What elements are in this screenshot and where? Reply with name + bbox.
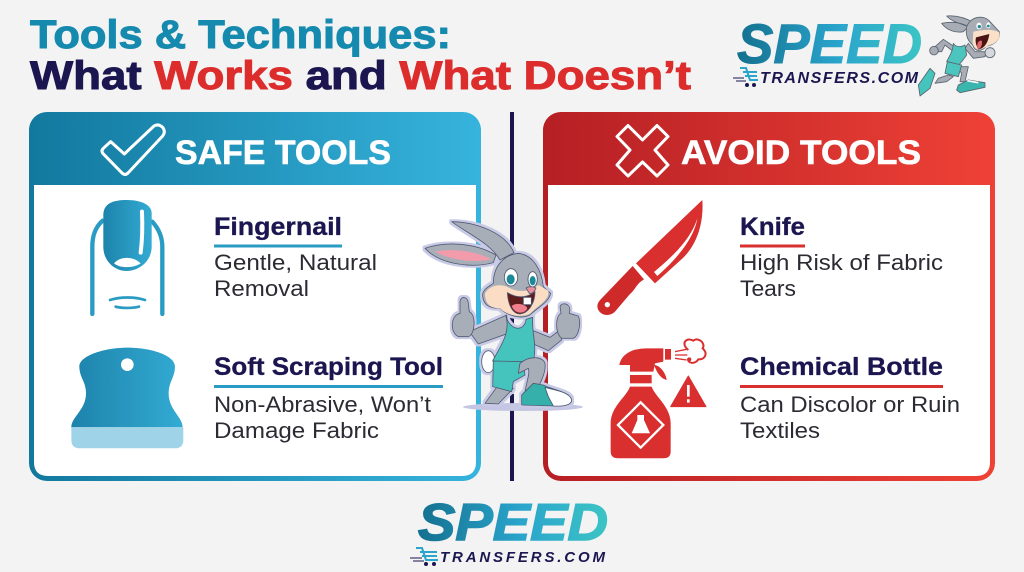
panel body: avoid tools (548, 185, 990, 476)
heading: avoid tools: AVOID TOOLS (681, 134, 921, 172)
panel body: safe tools (34, 185, 476, 476)
text: fingernail: Removal (214, 276, 309, 301)
text: chemical bottle: Textiles (740, 418, 820, 443)
panel: avoid tools (543, 112, 995, 481)
text: knife: High Risk of Fabric (740, 250, 943, 275)
heading: safe tools: SAFE TOOLS (175, 134, 391, 172)
icon: knife (597, 200, 703, 315)
text: soft scraping tool: Non-Abrasive, Won’t (214, 392, 431, 417)
text: fingernail (214, 213, 377, 301)
text: soft scraping tool (214, 353, 443, 443)
icon: check mark (102, 125, 164, 174)
footer logo tagline: TRANSFERS.COM (440, 549, 606, 566)
mascot: rabbit thumbs up (425, 222, 580, 406)
title: Tools & Techniques: (30, 13, 451, 57)
logo running rabbit (918, 16, 1000, 96)
mascot shadow (463, 403, 583, 411)
text: knife: Tears (740, 276, 796, 301)
text: fingernail: Gentle, Natural (214, 250, 377, 275)
text: chemical bottle: Can Discolor or Ruin (740, 392, 960, 417)
title: What Works and What Doesn’t (30, 54, 691, 98)
icon: soft scraping tool (71, 348, 183, 448)
logo wordmark: SPEED (737, 12, 922, 75)
text: fingernail: Fingernail (214, 213, 342, 241)
logo tagline: TRANSFERS.COM (760, 70, 919, 87)
icon: fingernail (92, 200, 162, 314)
footer logo wordmark: SPEED (418, 494, 608, 552)
text: knife (740, 213, 943, 301)
logo cart icon (733, 68, 758, 86)
text: soft scraping tool: Damage Fabric (214, 418, 379, 443)
text: chemical bottle (740, 353, 960, 443)
text: knife: Knife (740, 213, 805, 241)
panel: safe tools (29, 112, 481, 481)
icon: x mark (617, 126, 668, 176)
text: chemical bottle: Chemical Bottle (740, 353, 943, 381)
title (30, 13, 691, 98)
text: soft scraping tool: Soft Scraping Tool (214, 353, 443, 381)
logo: bottom center (410, 494, 608, 566)
icon: chemical spray bottle (611, 339, 706, 458)
logo: top right (733, 12, 1000, 96)
footer logo cart icon (410, 548, 438, 565)
